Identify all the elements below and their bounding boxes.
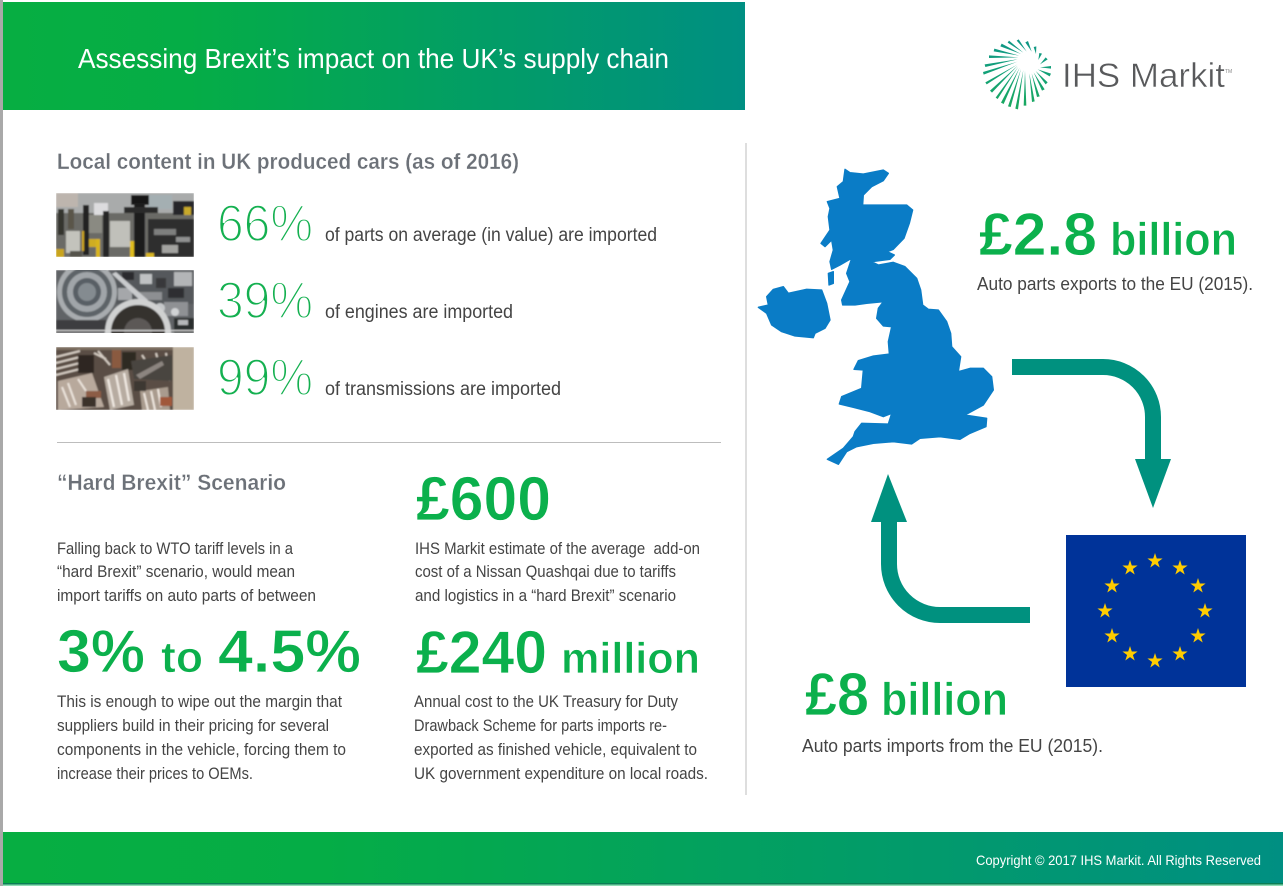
copyright: Copyright © 2017 IHS Markit. All Rights Reserved bbox=[976, 852, 1261, 868]
text: margin explanation: increase their prices to OEMs. bbox=[57, 765, 253, 783]
text: Nissan Qashqai cost: cost of a Nissan Quashqai due to tariffs bbox=[415, 563, 676, 581]
big number: £240 million bbox=[416, 619, 700, 686]
stat: £2.8 billion exports: £2.8 bbox=[979, 201, 1097, 268]
icon: EU flag bbox=[1066, 535, 1246, 687]
photo: engine bbox=[56, 270, 194, 333]
stat: 39% engines: of engines are imported bbox=[325, 302, 513, 323]
stat: 66% parts: 66% bbox=[217, 195, 313, 253]
text: duty drawback bbox=[414, 693, 708, 783]
big number: £240 million: million bbox=[561, 634, 700, 683]
text: Nissan Qashqai cost: and logistics in a “hard Brexit” scenario bbox=[415, 587, 676, 605]
stat: £8 billion imports bbox=[802, 661, 1103, 756]
text: WTO tariffs intro: import tariffs on auto parts of between bbox=[57, 587, 316, 605]
stat: 99% transmissions: of transmissions are imported bbox=[325, 379, 561, 400]
text: margin explanation: components in the vehicle, forcing them to bbox=[57, 741, 346, 759]
stat: 66% parts: of parts on average (in value) are imported bbox=[325, 225, 657, 246]
stat: 39% engines bbox=[217, 272, 513, 330]
big number: 3% to 4.5%: 4.5% bbox=[218, 618, 361, 685]
big number: 3% to 4.5%: 3% bbox=[57, 618, 145, 685]
footer banner bbox=[3, 832, 1283, 886]
big number: 3% to 4.5% bbox=[57, 618, 361, 685]
arrow: UK to EU bbox=[1012, 367, 1171, 508]
header banner bbox=[3, 2, 745, 110]
stat: 66% parts bbox=[217, 195, 657, 253]
stat: 99% transmissions bbox=[217, 349, 561, 407]
big number: £240 million: £240 bbox=[416, 619, 547, 686]
big number: £600: £600 bbox=[416, 465, 551, 534]
heading: hard brexit scenario: “Hard Brexit” Scenario bbox=[57, 470, 286, 495]
stat: £8 billion imports: Auto parts imports from the EU (2015). bbox=[802, 736, 1103, 756]
stat: £2.8 billion exports: billion bbox=[1110, 213, 1237, 265]
photo: car parts bbox=[56, 193, 194, 257]
text: duty drawback: exported as finished vehicle, equivalent to bbox=[414, 741, 697, 759]
photo: transmission bbox=[56, 347, 194, 410]
stat: £8 billion imports: billion bbox=[881, 673, 1008, 725]
text: Nissan Qashqai cost bbox=[415, 540, 700, 605]
logo wordmark: IHS Markit bbox=[1062, 57, 1226, 95]
arrow: EU to UK bbox=[871, 474, 1030, 615]
trademark: TM bbox=[1225, 69, 1232, 75]
text: Nissan Qashqai cost: IHS Markit estimate of the average add-on bbox=[415, 540, 700, 558]
text: margin explanation: This is enough to wipe out the margin that bbox=[57, 693, 342, 711]
stat: £8 billion imports: £8 bbox=[805, 661, 869, 728]
text: margin explanation bbox=[57, 693, 346, 783]
icon: spiral rays bbox=[983, 39, 1051, 109]
text: margin explanation: suppliers build in their pricing for several bbox=[57, 717, 329, 735]
logo: IHS Markit bbox=[983, 39, 1232, 109]
stat: £2.8 billion exports bbox=[977, 201, 1253, 294]
text: WTO tariffs intro: “hard Brexit” scenario, would mean bbox=[57, 563, 295, 581]
heading: local content: Local content in UK produced cars (as of 2016) bbox=[57, 149, 519, 174]
title: Assessing Brexit’s impact on the UK’s supply chain bbox=[78, 43, 669, 74]
map: UK and Ireland bbox=[758, 169, 993, 464]
text: WTO tariffs intro bbox=[57, 540, 316, 605]
stat: £2.8 billion exports: Auto parts exports to the EU (2015). bbox=[977, 274, 1253, 294]
big number: 3% to 4.5%: to bbox=[161, 633, 203, 682]
text: duty drawback: Drawback Scheme for parts imports re- bbox=[414, 717, 667, 735]
stat: 39% engines: 39% bbox=[217, 272, 313, 330]
text: WTO tariffs intro: Falling back to WTO tariff levels in a bbox=[57, 540, 294, 558]
text: duty drawback: Annual cost to the UK Treasury for Duty bbox=[414, 693, 679, 711]
text: duty drawback: UK government expenditure on local roads. bbox=[414, 765, 708, 783]
stat: 99% transmissions: 99% bbox=[217, 349, 313, 407]
